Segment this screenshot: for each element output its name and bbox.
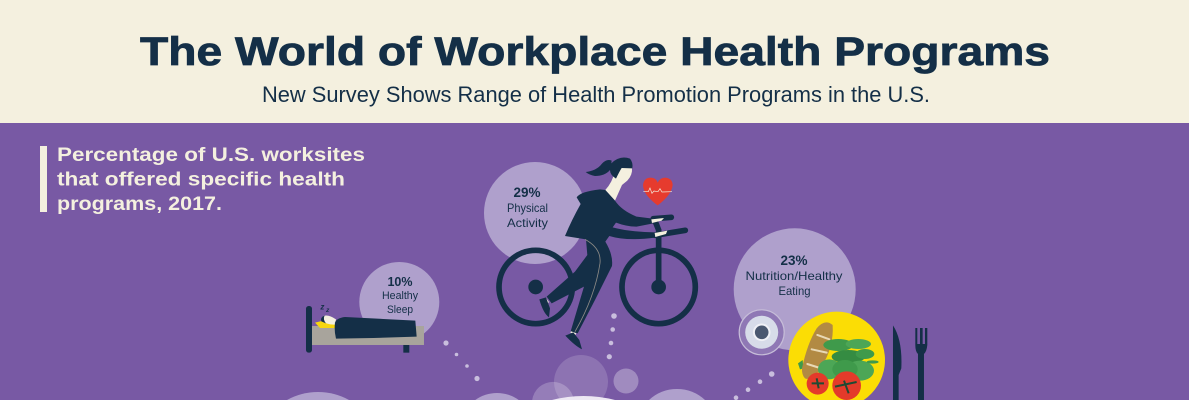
purple background panel <box>0 123 1189 400</box>
shoes <box>539 297 550 317</box>
icon: woman riding bicycle <box>499 158 695 349</box>
dotted path from nutrition <box>734 371 774 400</box>
nutrition bubble: 23% <box>780 253 808 268</box>
bread <box>802 322 833 379</box>
healthy sleep bubble: 10% <box>387 275 413 289</box>
nutrition bubble <box>734 228 856 350</box>
physical activity bubble: Activity <box>507 216 548 230</box>
trouser seam <box>575 239 600 332</box>
neck and face <box>605 168 632 201</box>
icon: plate of food <box>788 312 885 400</box>
physical activity bubble: Physical <box>507 201 548 215</box>
dotted path from activity <box>607 313 617 359</box>
tomatoes <box>807 373 829 395</box>
hair and ponytail <box>586 158 633 179</box>
lower left bubble <box>287 392 349 400</box>
physical activity bubble: 29% <box>513 185 541 200</box>
lower centre-right bubble <box>649 389 705 400</box>
title: The World of Workplace Health Programs <box>140 30 1050 74</box>
intro text block with bar <box>40 145 365 215</box>
icon: heart with pulse <box>643 178 673 205</box>
subtitle: New Survey Shows Range of Health Promotion Programs in the U.S. <box>262 82 930 107</box>
salad greens <box>818 339 879 381</box>
lower centre-left bubble <box>475 393 519 400</box>
central cluster of translucent bubbles <box>532 355 638 400</box>
physical activity bubble <box>484 162 586 264</box>
icon: wristband tracker <box>739 310 784 355</box>
icon: person sleeping in bed <box>306 302 424 353</box>
healthy sleep bubble: Healthy <box>382 290 418 302</box>
nutrition bubble: Eating <box>778 284 810 298</box>
intro text block with bar: that offered specific health <box>57 170 345 190</box>
icon: knife and fork <box>893 325 927 400</box>
intro text block with bar: Percentage of U.S. worksites <box>57 145 365 166</box>
healthy sleep bubble <box>359 262 439 342</box>
icon: person sleeping in bed: z <box>325 307 330 314</box>
healthy sleep bubble: Sleep <box>387 304 413 316</box>
cuffs and hands <box>545 298 576 334</box>
salad back leaf <box>798 360 803 369</box>
dotted path from sleep <box>443 340 480 381</box>
icon: person sleeping in bed: z <box>319 302 324 311</box>
bicycle <box>499 217 695 324</box>
intro text block with bar: programs, 2017. <box>57 194 222 215</box>
body <box>547 189 655 333</box>
nutrition bubble: Nutrition/Healthy <box>746 269 842 283</box>
header band <box>0 0 1189 123</box>
